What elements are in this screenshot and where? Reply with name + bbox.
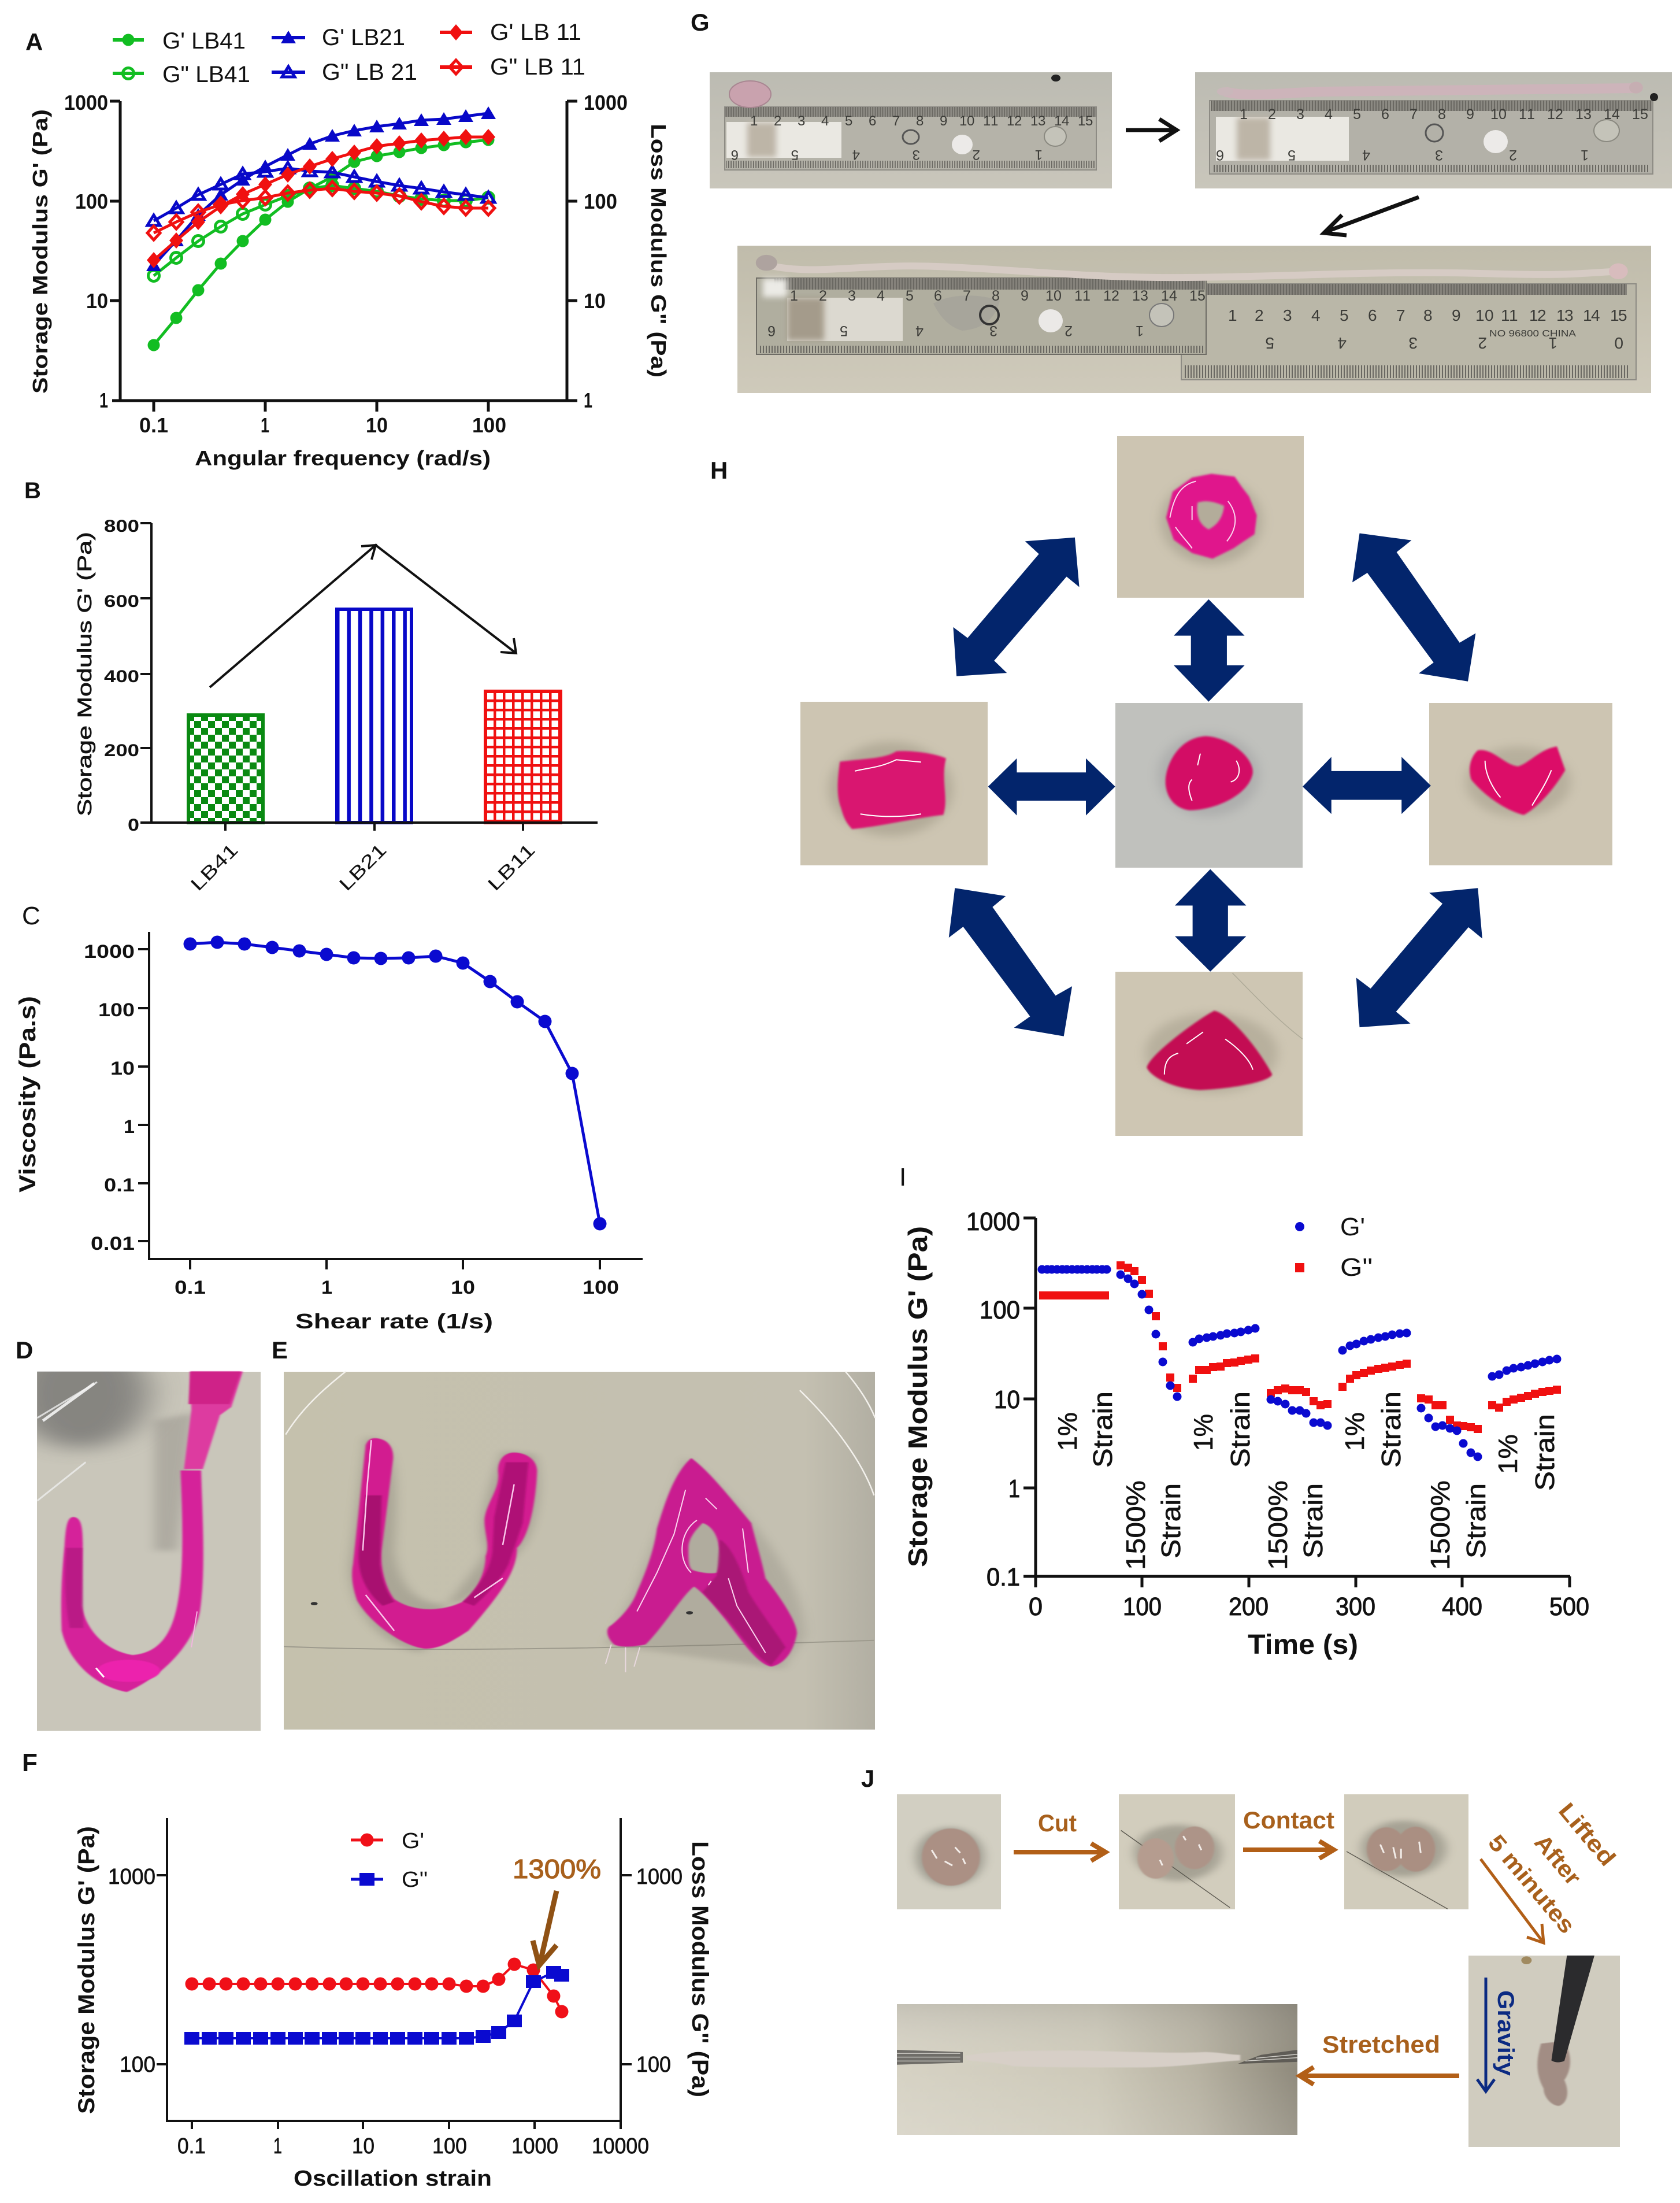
Cut arrow and label: Cut [1038,1809,1077,1837]
strain annotations I: Strain [1530,1414,1560,1491]
trend arrows B [210,545,516,687]
axis tick labels A: 100 [472,413,506,437]
label I: I [899,1163,906,1191]
tick labels C: 100 [98,999,135,1020]
tick labels I: 200 [1229,1593,1269,1621]
photo 1: unstretched hydrogel [710,72,1112,188]
label G: G [691,9,710,36]
tick labels B: 400 [104,667,139,686]
tick labels B: 600 [104,592,139,611]
panel J: self-healing sequence [861,1765,1620,2147]
label C: C [22,902,40,930]
panel D: printed J photo [12,1336,261,1731]
tick labels I: 1 [1008,1475,1020,1503]
axis tick labels A: 100 [584,190,617,213]
axis titles C [15,996,493,1333]
tick labels I: 100 [1123,1593,1162,1621]
photo 3: further stretched hydrogel across two rulers: NO 96800 CHINA [1489,329,1576,339]
legend A [113,20,585,87]
strain annotations I: Strain [1156,1483,1186,1558]
tick labels C: 10 [110,1058,135,1079]
Gravity arrow and label: Gravity [1493,1990,1518,2076]
bars B [188,609,561,823]
panel A: frequency sweep chart [25,20,670,470]
axis tick labels A: 10 [86,289,108,313]
tick labels I: 500 [1549,1593,1589,1621]
tick labels I: 10 [994,1386,1020,1414]
photo D [37,1371,261,1731]
photo 2: stretched hydrogel [1195,72,1672,188]
contacted gel pieces [1347,1820,1448,1909]
photo 3: further stretched hydrogel across two rulers: 543210 [1265,334,1623,352]
strain annotations I: Strain [1088,1391,1118,1468]
tick labels C: 0.01 [91,1233,135,1254]
tick labels F: 10 [352,2134,374,2158]
lifted after 5 minutes arrow and label: After [1529,1830,1586,1890]
photo E [284,1372,875,1730]
axis titles I: Storage Modulus G' (Pa) [903,1226,933,1567]
nozzle and extruded J [61,1372,243,1692]
double arrows H [949,533,1482,1036]
tick labels C: 1 [124,1116,135,1137]
crossover callout 1300%: 1300% [513,1854,601,1884]
label F: F [22,1749,38,1777]
axis tick labels A: 1000 [584,91,628,114]
label A: A [25,28,43,55]
label E: E [272,1336,288,1364]
axis tick labels A: 0.1 [139,413,168,437]
tick labels F: 10000 [592,2134,649,2158]
strain annotations I: Strain [1461,1483,1491,1558]
axis titles F: Storage Modulus G' (Pa) [74,1826,99,2114]
Contact arrow and label: Contact [1243,1806,1334,1834]
square gel [829,742,952,836]
intact gel [915,1828,984,1887]
legend A: G' LB41 [162,28,246,54]
y axis title B: Storage Modulus G' (Pa) [74,532,96,816]
tick labels C: 0.1 [175,1277,206,1298]
Stretched arrow and label [1300,2031,1459,2084]
tick labels I: 0 [1029,1593,1043,1621]
lifted after 5 minutes arrow and label [1481,1798,1620,1943]
photo 2: stretched hydrogel: 654321 [1216,147,1589,163]
photo 2: stretched hydrogel: 123456789101112131415 [1240,106,1648,123]
tick labels B: 800 [104,517,139,536]
axes F [157,1818,632,2129]
gel lifted with tweezers [1521,1956,1594,2106]
strain annotations I: 1500% [1121,1480,1151,1570]
tick labels F: 1000 [511,2134,558,2158]
tick labels I: 0.1 [987,1563,1020,1591]
strain annotations I: 1% [1493,1434,1523,1474]
round gel [1158,734,1259,816]
tick labels F [108,1865,683,2158]
legend I [1295,1213,1373,1282]
arrow down-left [1324,197,1419,235]
Contact arrow and label [1243,1806,1334,1858]
axis titles F: Loss Modulus G" (Pa) [687,1841,713,2097]
strain annotations I: 1% [1052,1412,1082,1451]
tick labels F: 1000 [108,1865,155,1889]
legend A: G' LB 11 [490,20,581,45]
G' data points I [1042,1269,1557,1457]
panel H: shape moulding photos with arrows [710,436,1612,1136]
cut gel pieces [1121,1825,1230,1908]
photo 3: further stretched hydrogel across two rulers [737,246,1651,393]
photo 1: unstretched hydrogel: 123456789101112131415 [750,113,1093,129]
axis tick labels A: 1000 [64,91,108,114]
legend F: G" [402,1868,428,1892]
strain annotations I: Strain [1298,1483,1328,1558]
axes C [138,932,643,1269]
photo 3: further stretched hydrogel across two rulers: 123456789101112131415 [1228,306,1627,324]
axis titles I [903,1226,1358,1660]
legend F [351,1829,428,1892]
axis tick labels A: 1 [584,388,592,412]
legend A: G" LB41 [162,62,250,87]
axis titles F [74,1826,713,2191]
photo 1: unstretched hydrogel: 654321 [731,147,1043,162]
label H: H [710,457,728,484]
axis tick labels A: 1 [99,388,108,412]
tick labels C: 10 [451,1277,475,1298]
panel C: viscosity chart [15,902,643,1333]
axes B [140,523,598,831]
tick labels C [84,941,619,1298]
letter U [352,1438,537,1649]
photo backgrounds H [800,436,1612,1136]
tick labels F: 100 [636,2053,671,2077]
label J: J [861,1765,874,1792]
tick labels F: 100 [120,2053,155,2077]
lifted after 5 minutes arrow and label: Lifted [1553,1798,1620,1871]
tick labels C: 1000 [84,941,135,962]
tick labels F: 1000 [636,1865,683,1889]
lifted after 5 minutes arrow and label: 5 minutes [1483,1830,1580,1938]
panel G: ruler stretching photos [691,9,1672,393]
strain annotations I [1052,1391,1560,1570]
tick labels B [104,517,139,835]
crossover callout 1300% [513,1854,601,1965]
tick labels F: 1 [273,2134,282,2158]
strain annotations I: Strain [1225,1391,1255,1468]
axes A [110,101,577,412]
category labels B: LB11 [483,839,539,895]
photo 3: further stretched hydrogel across two rulers: 123456789101112131415 [790,288,1206,304]
axis titles A: Loss Modulus G" (Pa) [647,124,670,377]
data series F [192,1964,562,2038]
tick labels I: 400 [1442,1593,1482,1621]
axes I [1023,1218,1570,1587]
axis tick labels A [64,91,628,437]
axis tick labels A: 100 [75,190,108,213]
strain annotations I: 1500% [1263,1480,1293,1570]
tick labels F: 100 [432,2134,467,2158]
ring shaped gel [1160,474,1262,564]
Cut arrow and label [1014,1809,1106,1861]
triangle gel [1145,1011,1278,1093]
tick labels B: 0 [128,816,139,835]
legend I: G' [1340,1213,1365,1241]
tick labels I [966,1208,1589,1621]
axis titles C: Viscosity (Pa.s) [15,996,40,1193]
Gravity arrow and label [1477,1978,1518,2091]
tick labels I: 100 [980,1296,1020,1324]
Stretched arrow and label: Stretched [1322,2031,1440,2058]
strain annotations I: Strain [1376,1391,1406,1468]
legend F: G' [402,1829,424,1853]
panel I: step strain recovery chart [899,1163,1589,1660]
tick labels C: 100 [583,1277,619,1298]
panel E: printed UA photo [272,1336,875,1730]
stretched gel between forceps [897,2050,1297,2068]
axis tick labels A: 1 [261,413,269,437]
axis titles C: Shear rate (1/s) [295,1309,493,1333]
legend A: G" LB 11 [490,54,585,80]
label D: D [16,1336,33,1364]
strain annotations I: 1500% [1425,1480,1455,1570]
axis titles I: Time (s) [1248,1630,1358,1660]
panel B: bar chart of storage modulus [24,478,598,895]
tick labels F: 0.1 [177,2134,206,2158]
category labels B: LB41 [186,839,242,895]
legend A: G" LB 21 [322,60,417,85]
strain annotations I: 1% [1188,1414,1218,1451]
legend I: G" [1340,1253,1373,1282]
axis titles A [28,109,670,470]
tick labels I: 300 [1336,1593,1375,1621]
tick labels C: 1 [321,1277,332,1298]
G'' data points I [1043,1265,1557,1429]
step photos J [897,1794,1620,2147]
tick labels C: 0.1 [104,1175,135,1195]
category labels B: LB21 [335,839,391,895]
data series A [154,113,488,345]
legend A: G' LB21 [322,25,405,50]
axis titles A: Storage Modulus G' (Pa) [28,109,52,394]
viscosity curve C [190,942,600,1224]
axis tick labels A: 10 [584,289,606,313]
label B: B [24,478,41,503]
axis tick labels A: 10 [366,413,388,437]
arrow right [1126,119,1177,141]
photo 3: further stretched hydrogel across two rulers: 654321 [767,323,1144,339]
category labels B [186,839,539,895]
axis titles F: Oscillation strain [294,2167,492,2191]
strain annotations I: 1% [1340,1412,1370,1451]
tick labels B: 200 [104,741,139,760]
axis titles A: Angular frequency (rad/s) [195,446,491,470]
tick labels I: 1000 [966,1208,1020,1236]
panel F: strain sweep chart [22,1749,713,2191]
letter A [606,1458,797,1672]
heart gel [1466,746,1571,817]
